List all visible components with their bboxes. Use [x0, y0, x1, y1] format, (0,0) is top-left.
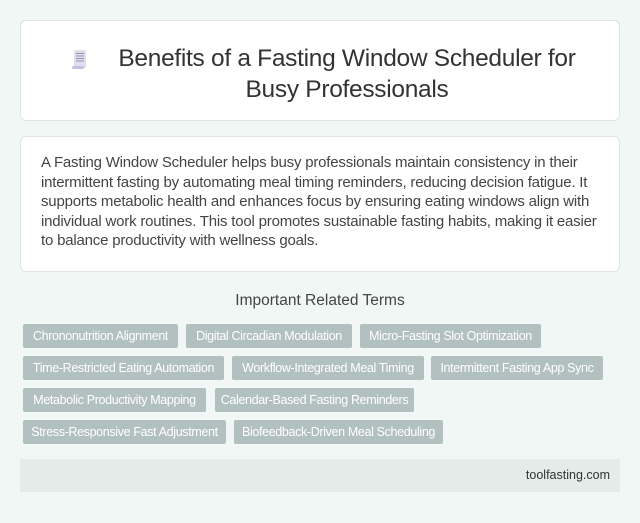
tags: Chrononutrition Alignment: [33, 329, 168, 343]
description text: intermittent fasting by automating meal timing reminders, reducing decision fatigue. It: [41, 174, 587, 191]
tags: Digital Circadian Modulation: [196, 329, 342, 343]
description panel: [20, 136, 620, 272]
title: Busy Professionals: [246, 76, 448, 103]
tags: [23, 324, 603, 444]
tags: Workflow-Integrated Meal Timing: [242, 361, 414, 375]
description text: to balance productivity with wellness goals.: [41, 232, 318, 249]
section heading: Important Related Terms: [235, 292, 405, 309]
title: Benefits of a Fasting Window Scheduler for: [118, 45, 576, 72]
title: [118, 45, 576, 103]
header panel: [20, 20, 620, 121]
footer: [20, 459, 620, 492]
footer: toolfasting.com: [526, 468, 610, 482]
tags: Micro-Fasting Slot Optimization: [369, 329, 532, 343]
description text: A Fasting Window Scheduler helps busy professionals maintain consistency in their: [41, 154, 578, 171]
description text: individual work routines. This tool promotes sustainable fasting habits, making it easier: [41, 213, 597, 230]
tags: Stress-Responsive Fast Adjustment: [31, 425, 218, 439]
tags: Time-Restricted Eating Automation: [33, 361, 214, 375]
tags: Intermittent Fasting App Sync: [440, 361, 594, 375]
tags: Calendar-Based Fasting Reminders: [221, 393, 408, 407]
icon: document: [74, 50, 86, 68]
description text: supports metabolic health and enhances focus by ensuring eating windows align with: [41, 193, 589, 210]
tags: Biofeedback-Driven Meal Scheduling: [242, 425, 435, 439]
tags: Metabolic Productivity Mapping: [33, 393, 196, 407]
description text: [41, 154, 597, 249]
